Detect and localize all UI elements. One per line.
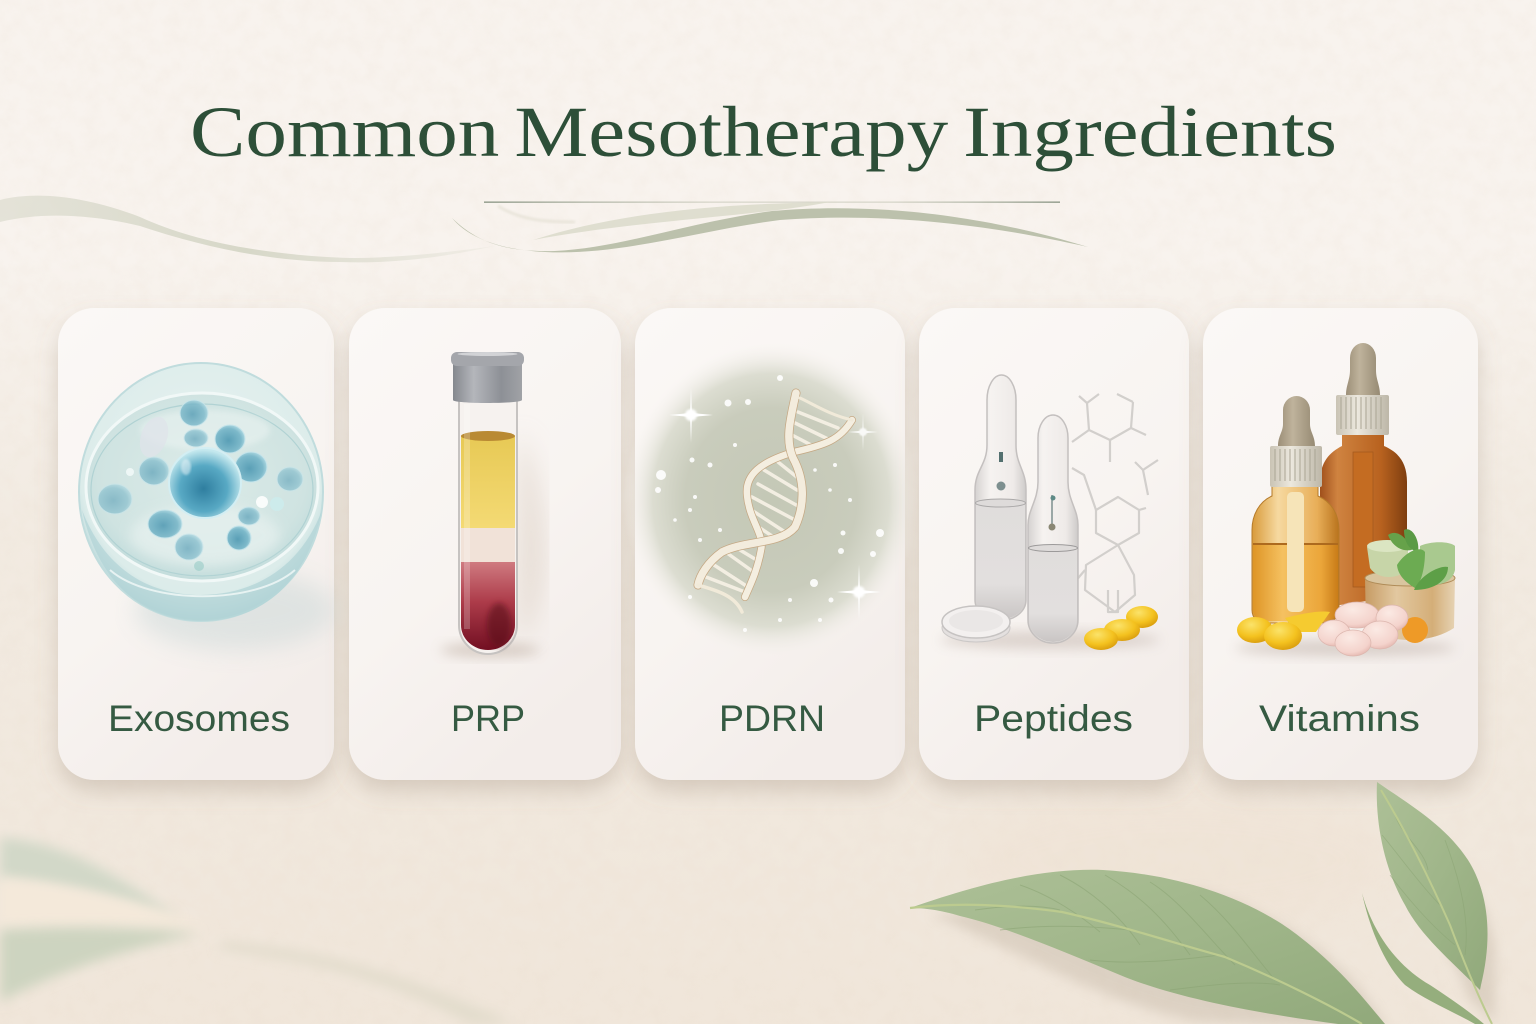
panel: vitamins xyxy=(1203,308,1478,780)
icon: ampoules, molecule and capsules xyxy=(940,375,1160,650)
decorative swoosh: lower left xyxy=(0,838,515,1024)
decorative swoosh: under title xyxy=(452,202,1088,252)
label: PRP: PRP xyxy=(451,698,525,739)
big amber dropper bottle xyxy=(1320,343,1407,605)
icon: petri dish with exosomes xyxy=(79,363,335,650)
label: Peptides: Peptides xyxy=(974,698,1133,739)
decorative swoosh: upper left xyxy=(0,196,495,262)
icon: DNA helix with sparkles xyxy=(623,342,919,658)
icon: dropper bottles, jars and pills xyxy=(1235,343,1455,656)
label: Vitamins: Vitamins xyxy=(1259,698,1420,739)
panel: PRP xyxy=(349,308,621,780)
jars with green leaves xyxy=(1365,529,1455,640)
label: PDRN: PDRN xyxy=(719,698,825,739)
panel: exosomes xyxy=(58,308,335,780)
icon: PRP test tube xyxy=(440,352,543,657)
capsules and pills xyxy=(1237,602,1428,656)
icon: large green leaf xyxy=(910,870,1385,1024)
icon: right green leaves xyxy=(1362,782,1496,1024)
panel: peptides xyxy=(919,308,1189,780)
label: Exosomes: Exosomes xyxy=(108,698,290,739)
small golden dropper bottle xyxy=(1252,396,1339,623)
title: Common Mesotherapy Ingredients xyxy=(190,92,1337,172)
panel: PDRN xyxy=(623,308,919,780)
